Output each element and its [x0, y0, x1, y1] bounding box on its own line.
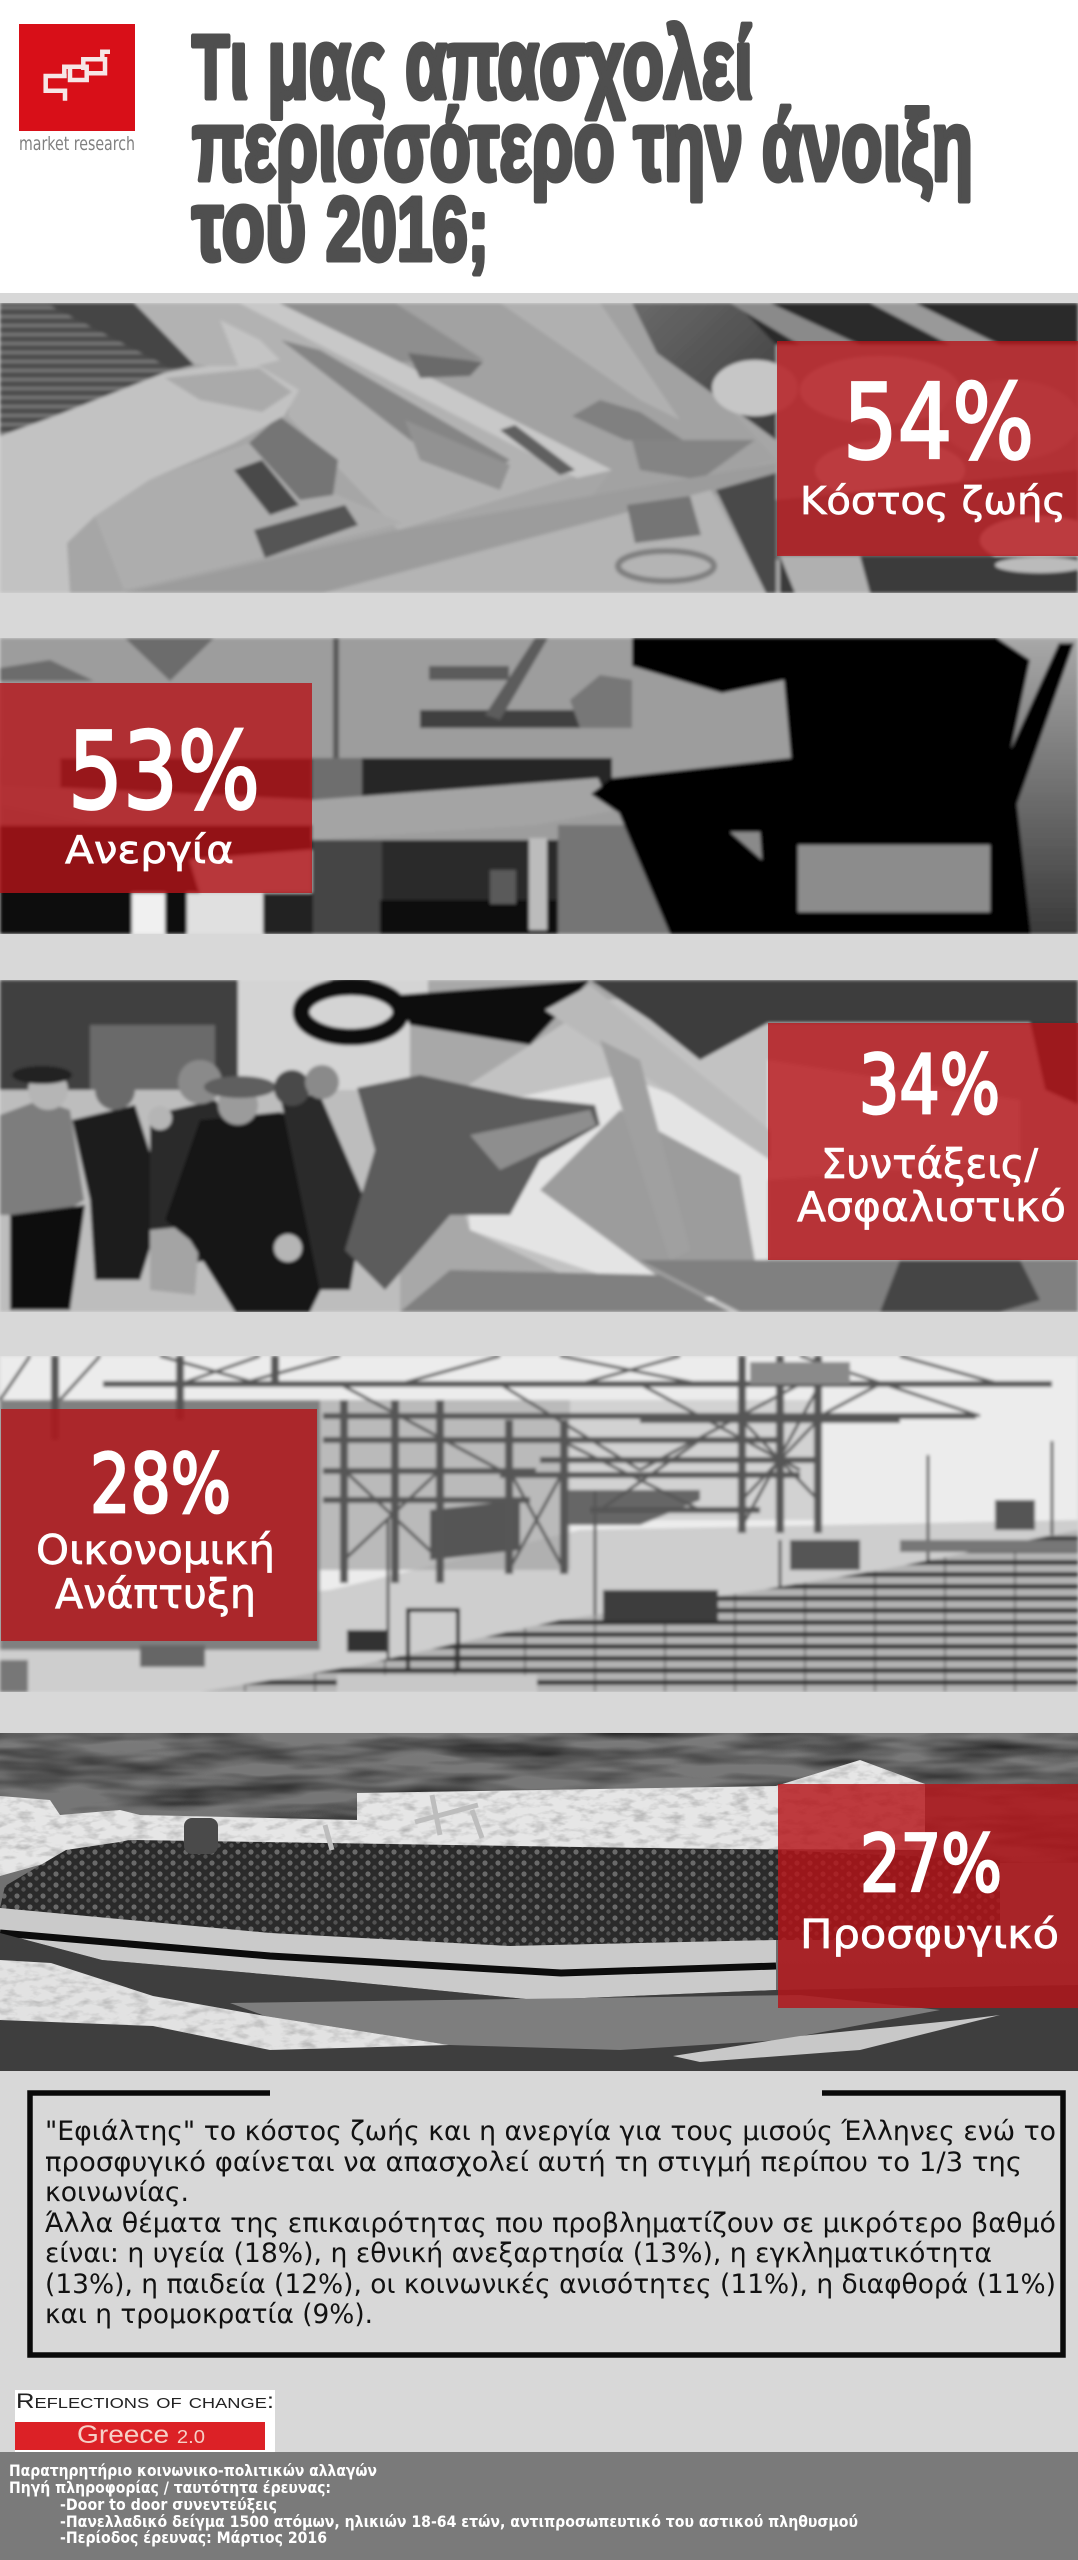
text block: commentary: Άλλα θέματα της επικαιρότητας που προβληματίζουν σε μικρότερο βαθμό — [45, 2208, 1056, 2239]
footer: survey source: -Περίοδος έρευνας: Μάρτιος 2016 — [60, 2528, 327, 2547]
scissors — [301, 987, 401, 1037]
title: του 2016; — [192, 170, 489, 282]
callout: 28% economic development: Ανάπτυξη — [55, 1570, 256, 1618]
callout: 34% pensions: Ασφαλιστικό — [797, 1183, 1066, 1231]
text block: commentary: "Εφιάλτης" το κόστος ζωής και η ανεργία για τους μισούς Έλληνες ενώ το — [45, 2116, 1056, 2147]
callout: 28% economic development: 28% — [90, 1438, 231, 1532]
title — [192, 8, 973, 282]
callout: 34% pensions: 34% — [859, 1039, 1000, 1133]
panel: unemployment — [0, 638, 1078, 934]
panel: commentary text box — [30, 2093, 1063, 2355]
callout: 28% economic development — [1, 1409, 317, 1641]
text block: commentary: (13%), η παιδεία (12%), οι κοινωνικές ανισότητες (11%), η διαφθορά (11%) — [45, 2269, 1056, 2300]
photo: overcrowded refugee boat at sea — [0, 1733, 1078, 2071]
footer: survey source: -Πανελλαδικό δείγμα 1500 ατόμων, ηλικιών 18-64 ετών, αντιπροσωπευτικό του αστικού πληθυσμού — [60, 2512, 858, 2531]
callout: 53% unemployment: 53% — [68, 710, 260, 833]
icon: stepped squares mark — [46, 52, 110, 101]
text block: commentary: είναι: η υγεία (18%), η εθνική ανεξαρτησία (13%), η εγκληματικότητα — [45, 2238, 992, 2269]
callout: 53% unemployment: Ανεργία — [65, 828, 234, 872]
callout: 54% cost of living: 54% — [843, 363, 1034, 483]
callout: 27% refugee crisis — [778, 1784, 1078, 2008]
callout: 53% unemployment — [0, 683, 312, 893]
photo: euro notes in hand — [0, 303, 1078, 593]
logo: market research: market research — [19, 133, 135, 155]
logo: Reflections of change Greece 2.0: Greece 2.0 — [77, 2421, 205, 2449]
callout: 34% pensions — [768, 1023, 1078, 1260]
logo: market research — [19, 24, 135, 155]
footer: survey source: Πηγή πληροφορίας / ταυτότητα έρευνας: — [9, 2478, 331, 2497]
panel: cost of living — [0, 303, 1078, 593]
text block: commentary: και η τρομοκρατία (9%). — [45, 2299, 373, 2330]
photo: container port with cranes — [0, 1356, 1078, 1692]
footer: survey source — [0, 2452, 1078, 2560]
callout: 34% pensions: Συντάξεις/ — [821, 1140, 1038, 1188]
footer: survey source: -Door to door συνεντεύξεις — [60, 2495, 277, 2514]
callout: 28% economic development: Οικονομική — [36, 1526, 275, 1574]
hand with money — [345, 1075, 600, 1290]
photo: pensioners and scissors cutting money — [0, 980, 1078, 1312]
photo: silhouette of man on chair — [0, 638, 1078, 934]
callout: 54% cost of living: Κόστος ζωής — [800, 479, 1066, 523]
footer: survey source: Παρατηρητήριο κοινωνικο-πολιτικών αλλαγών — [9, 2461, 377, 2480]
panel: economic development — [0, 1356, 1078, 1692]
panel: pensions and insurance — [0, 980, 1078, 1312]
callout: 27% refugee crisis: Προσφυγικό — [800, 1912, 1059, 1958]
text block: commentary: προσφυγικό φαίνεται να απασχολεί αυτή τη στιγμή περίπου το 1/3 της — [45, 2147, 1022, 2178]
callout: 27% refugee crisis: 27% — [860, 1820, 1002, 1910]
panel: refugee crisis — [0, 1733, 1078, 2071]
text block: commentary — [45, 2116, 1056, 2330]
logo: Reflections of change Greece 2.0 — [15, 2390, 275, 2452]
people — [0, 1100, 84, 1215]
logo: Reflections of change Greece 2.0: Reflections of change: — [16, 2390, 274, 2413]
title: Τι μας απασχολεί — [192, 8, 753, 120]
text block: commentary: κοινωνίας. — [45, 2177, 189, 2208]
callout: 54% cost of living — [777, 341, 1078, 556]
